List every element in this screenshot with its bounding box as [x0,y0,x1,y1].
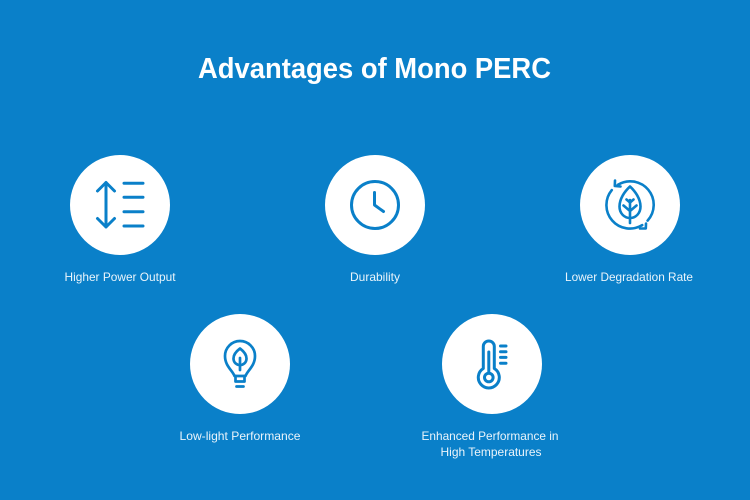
label: Enhanced Performance in High Temperatures: Enhanced Performance in [422,429,558,443]
icon: clock [352,182,398,228]
item: Lower Degradation Rate [565,155,693,284]
label: Durability: Durability [350,270,400,284]
icon: leaf in cycle arrows [606,180,654,229]
title: Advantages of Mono PERC [198,53,551,85]
item: Enhanced Performance in High Temperatures [422,314,558,459]
item: Durability [325,155,425,284]
label: Higher Power Output: Higher Power Output [64,270,176,284]
icon: vertical arrow with lines [98,182,143,227]
label: Enhanced Performance in High Temperatures [422,429,558,459]
label: Low-light Performance: Low-light Performance [180,429,301,443]
label: Lower Degradation Rate: Lower Degradation Rate [565,270,693,284]
icon: thermometer [478,341,506,388]
item: Low-light Performance [180,314,301,443]
item: Higher Power Output [64,155,176,284]
icon: light bulb with leaf [225,341,255,386]
label: Enhanced Performance in High Temperatures: High Temperatures [440,445,542,459]
